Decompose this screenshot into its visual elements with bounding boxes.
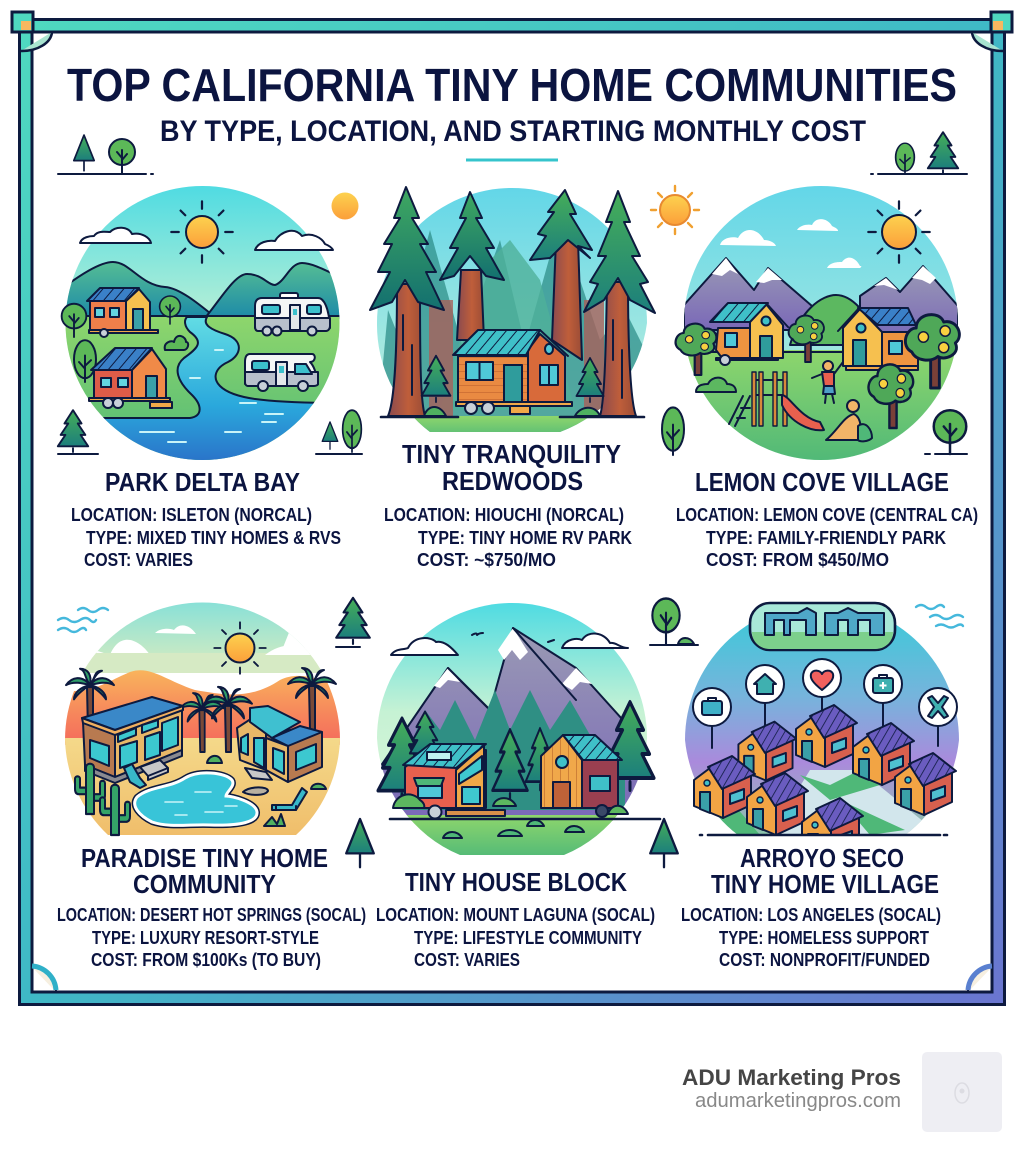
- lemon trees right: [868, 315, 959, 428]
- details: [384, 505, 632, 570]
- details: TYPE: MIXED TINY HOMES & RVS: [86, 528, 341, 548]
- details: TYPE: TINY HOME RV PARK: [418, 528, 632, 548]
- icon: cone tree: [346, 819, 374, 867]
- icon: orange sun: [332, 192, 358, 220]
- clouds: [80, 228, 333, 250]
- panel: Tiny Tranquility Redwoods: [370, 186, 655, 570]
- heading: PARK DELTA BAY: [105, 467, 300, 497]
- details: COST: FROM $450/MO: [706, 550, 889, 570]
- heading: TINY TRANQUILITY: [402, 439, 621, 469]
- heading: PARADISE TINY HOME: [81, 843, 328, 873]
- subtitle: BY TYPE, LOCATION, AND STARTING MONTHLY COST: [160, 115, 866, 148]
- title divider: [466, 158, 558, 162]
- tree: [62, 304, 86, 337]
- lemon tree left: [676, 324, 717, 375]
- resort house right: [237, 706, 322, 782]
- icon: small round tree: [925, 410, 967, 454]
- tiny homes: [693, 704, 957, 834]
- cacti: [75, 764, 130, 835]
- tiny house 1: [87, 288, 158, 337]
- cabin right: [541, 735, 628, 817]
- details: [57, 905, 366, 970]
- heading: LEMON COVE VILLAGE: [695, 467, 949, 497]
- details: TYPE: LUXURY RESORT-STYLE: [92, 928, 319, 948]
- icon: sun: [214, 622, 266, 674]
- details: [681, 905, 941, 970]
- icon: sun: [868, 201, 930, 263]
- details: COST: VARIES: [84, 550, 193, 570]
- heading: TINY HOUSE BLOCK: [405, 867, 627, 897]
- RV 2: [245, 354, 318, 391]
- footer logo: [922, 1052, 1002, 1132]
- details: LOCATION: MOUNT LAGUNA (SOCAL): [376, 905, 655, 925]
- pine trees: [378, 702, 654, 802]
- RV 1: [255, 293, 330, 336]
- icon: small pine: [58, 410, 98, 454]
- ground line: [700, 834, 947, 836]
- panel: Tiny House Block: [376, 602, 660, 970]
- sun loungers: [124, 764, 307, 810]
- icon: trees top right: [871, 132, 967, 174]
- details: [676, 505, 978, 570]
- panel: Park Delta Bay: [60, 184, 345, 570]
- village sign: [750, 603, 895, 650]
- details: LOCATION: DESERT HOT SPRINGS (SOCAL): [57, 905, 366, 925]
- cloud: [391, 638, 458, 655]
- icon: oval tree: [662, 407, 684, 455]
- heading: COMMUNITY: [133, 869, 276, 899]
- illustration: redwood forest: [370, 186, 655, 440]
- details: COST: FROM $100Ks (TO BUY): [91, 950, 321, 970]
- icon: waves left: [58, 608, 108, 632]
- house left: [710, 303, 788, 365]
- resort house left: [82, 697, 183, 783]
- icon: trees top left: [58, 135, 153, 174]
- details: LOCATION: HIOUCHI (NORCAL): [384, 505, 624, 525]
- heading: [402, 439, 621, 496]
- tiny house: [453, 330, 572, 414]
- icon: pine top: [336, 598, 370, 647]
- heading: ARROYO SECO: [740, 843, 904, 873]
- icon: waves right: [916, 605, 963, 628]
- bush: [696, 378, 736, 392]
- bushes: [443, 820, 584, 838]
- details: TYPE: HOMELESS SUPPORT: [719, 928, 929, 948]
- details: [71, 505, 341, 570]
- details: TYPE: FAMILY-FRIENDLY PARK: [706, 528, 946, 548]
- panel: Lemon Cove Village: [676, 184, 978, 570]
- illustration: mountain cabins: [376, 602, 660, 860]
- house right: [838, 307, 918, 370]
- details: TYPE: LIFESTYLE COMMUNITY: [414, 928, 642, 948]
- icon: small trees: [316, 410, 362, 454]
- panel: Arroyo Seco Tiny Home Village: [681, 602, 962, 970]
- details: COST: NONPROFIT/FUNDED: [719, 950, 930, 970]
- tiny house 2: [89, 348, 172, 408]
- heading: [81, 843, 328, 899]
- illustration: supportive village: [685, 602, 959, 836]
- details: LOCATION: LOS ANGELES (SOCAL): [681, 905, 941, 925]
- lemon tree centre: [789, 316, 824, 362]
- icon: tree with hill: [650, 598, 698, 645]
- icon: rayed sun: [651, 186, 699, 234]
- cloud: [562, 634, 628, 648]
- details: COST: ~$750/MO: [417, 550, 556, 570]
- desert shrubs: [207, 756, 326, 826]
- icon: cone tree: [650, 819, 678, 867]
- footer brand: adumarketingpros.com: [695, 1090, 901, 1112]
- footer brand: ADU Marketing Pros: [682, 1065, 901, 1090]
- details: LOCATION: LEMON COVE (CENTRAL CA): [676, 505, 978, 525]
- palm trees: [66, 668, 336, 752]
- details: COST: VARIES: [414, 950, 520, 970]
- icon: sun: [171, 201, 233, 263]
- playground: [729, 372, 824, 430]
- swimming pool: [135, 773, 257, 825]
- children playing: [812, 361, 872, 441]
- footer brand: [682, 1065, 901, 1112]
- illustration: river and RV park: [60, 184, 345, 466]
- illustration: desert resort: [64, 600, 342, 838]
- heading: [711, 843, 939, 899]
- cabin left: [390, 744, 660, 819]
- details: [376, 905, 655, 970]
- details: LOCATION: ISLETON (NORCAL): [71, 505, 312, 525]
- heading: REDWOODS: [442, 466, 583, 496]
- illustration: family park: [676, 184, 960, 464]
- heading: TINY HOME VILLAGE: [711, 869, 939, 899]
- service icons: [693, 659, 957, 748]
- panel: Paradise Tiny Home Community: [57, 600, 366, 970]
- redwood trees: [370, 187, 655, 417]
- bird: [472, 633, 554, 642]
